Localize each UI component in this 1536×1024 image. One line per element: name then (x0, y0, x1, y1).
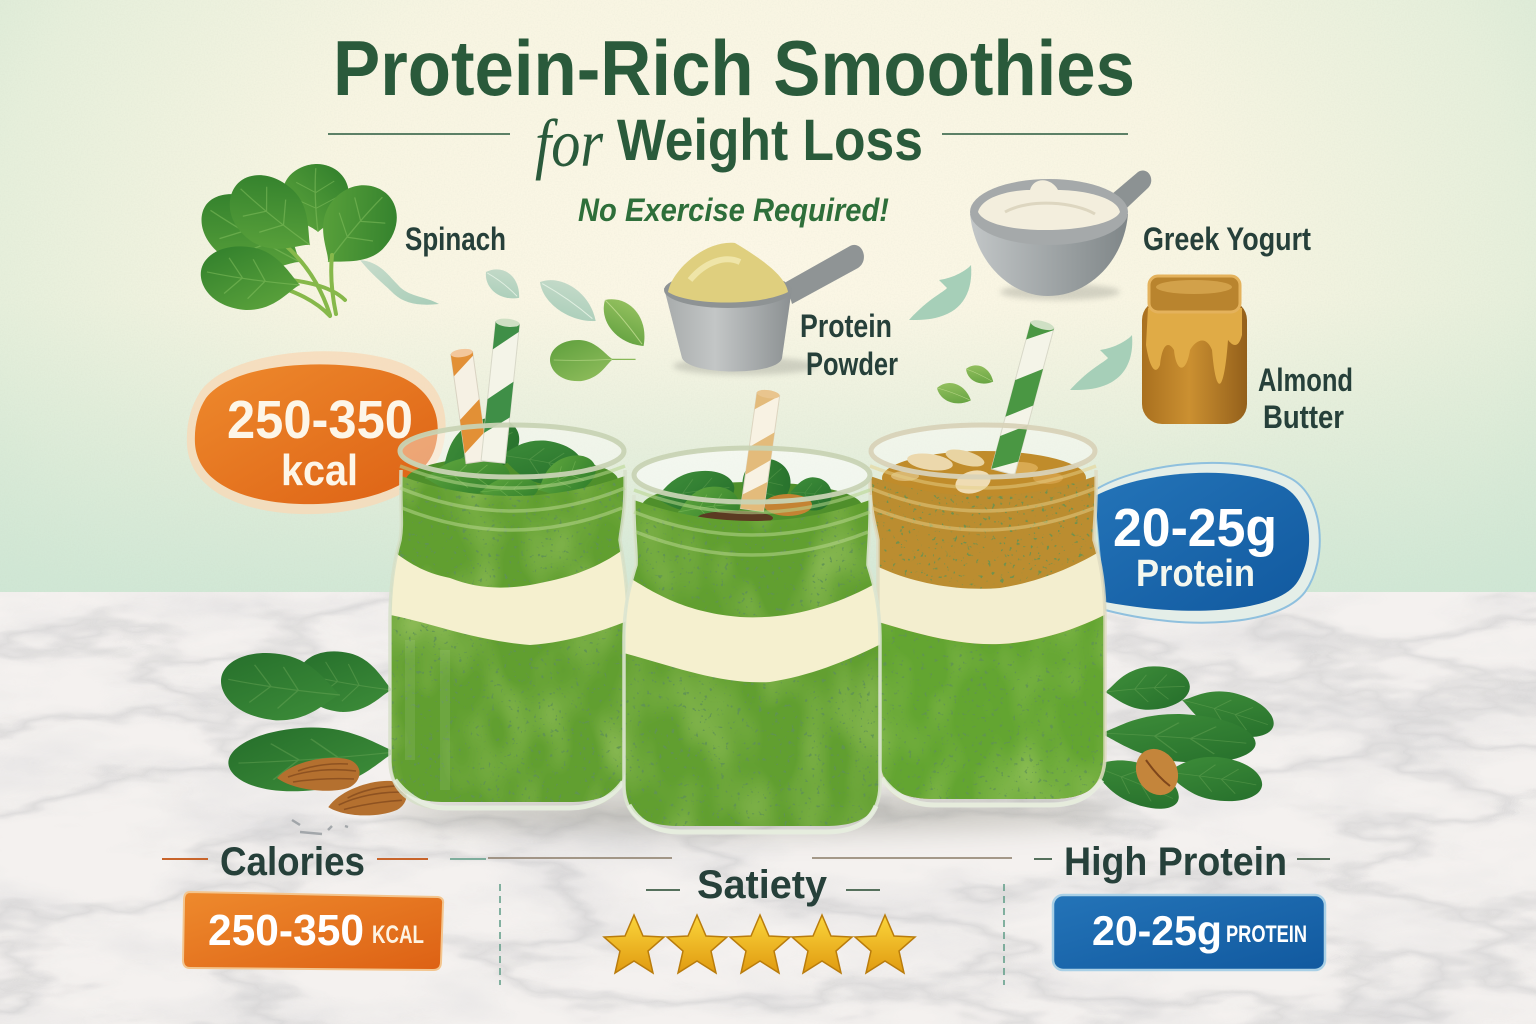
value box: protein: 20-25g (1092, 907, 1222, 954)
jar back glass (871, 426, 1095, 478)
label: greek yogurt: Greek Yogurt (1143, 221, 1311, 257)
label: almond butter: Butter (1263, 399, 1344, 435)
value box: calories (183, 892, 443, 970)
heading: high protein: High Protein (1064, 840, 1287, 884)
nut butter surface (882, 446, 1086, 505)
background wall (0, 0, 1536, 592)
jar: right smoothie (865, 318, 1110, 815)
smoothie layers (620, 495, 885, 835)
badge: protein: Protein (1136, 553, 1255, 595)
straw: orange striped (450, 348, 488, 464)
spinach and almond topping (652, 449, 834, 531)
value box: protein (1053, 895, 1325, 970)
spinach left of jars (216, 645, 398, 796)
value box: protein: PROTEIN (1226, 921, 1307, 948)
title: for (535, 105, 603, 181)
spinach right of jars (1083, 664, 1279, 818)
icon: spinach bunch (188, 160, 412, 317)
label: protein powder (800, 308, 898, 382)
spinach topping (424, 406, 602, 506)
title (328, 24, 1135, 181)
title: Weight Loss (617, 108, 923, 173)
straw: green striped (991, 318, 1055, 475)
glass jar and rim (870, 425, 1105, 805)
glass jar and rim (390, 425, 628, 808)
heading: satiety: Satiety (697, 863, 828, 907)
almonds left (277, 758, 408, 834)
icon: almond butter jar (1142, 276, 1247, 424)
jar back glass (634, 449, 870, 501)
value box: calories: 250-350 (208, 906, 364, 955)
jar: left smoothie (385, 318, 635, 810)
badge: calories: 250-350 (227, 390, 413, 450)
label: almond butter (1258, 362, 1353, 435)
straw: tan striped (741, 389, 780, 512)
smoothie surface (642, 482, 862, 530)
icon: protein powder scoop (664, 243, 864, 375)
smoothie layers (391, 476, 626, 802)
straw: green striped (481, 318, 520, 463)
label: spinach: Spinach (405, 221, 506, 257)
jar shadow (380, 792, 1120, 832)
label: almond butter: Almond (1258, 362, 1353, 398)
marble countertop (0, 592, 1536, 1024)
icon: greek yogurt bowl (970, 171, 1151, 300)
smoothie surface (406, 456, 618, 504)
badge: calories (187, 351, 446, 514)
five star rating (604, 915, 915, 973)
glass jar and rim (624, 448, 880, 832)
jar: middle smoothie (620, 389, 885, 835)
badge: protein (1095, 463, 1320, 623)
subtitle: No Exercise Required! (578, 192, 889, 228)
badge: protein: 20-25g (1113, 498, 1277, 558)
heading: calories: Calories (220, 840, 365, 884)
floating leaves (360, 260, 1132, 408)
badge: calories: kcal (281, 446, 358, 495)
smoothie layers (870, 476, 1105, 799)
value box: calories: KCAL (372, 921, 424, 949)
label: protein powder: Protein (800, 308, 892, 344)
label: protein powder: Powder (806, 346, 898, 382)
dividers (450, 858, 1012, 985)
jar back glass (400, 426, 624, 478)
almond right (1128, 741, 1186, 803)
title: Protein-Rich Smoothies (333, 24, 1135, 112)
